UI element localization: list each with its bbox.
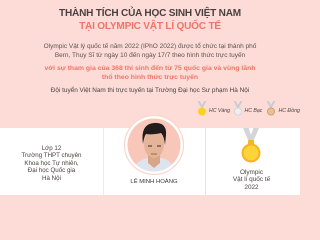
legend label: bronze: HC Đồng xyxy=(278,108,300,114)
intro text: Bern, Thụy Sĩ từ ngày 10 đến ngày 17/7 theo hình thức trực tuyến xyxy=(55,52,245,58)
legend label: gold: HC Vàng xyxy=(209,108,230,114)
panel: student band xyxy=(0,128,300,195)
student name: LÊ MINH HOÀNG xyxy=(130,179,178,185)
school text xyxy=(21,144,82,182)
title xyxy=(59,6,241,32)
school text: Đại học Quốc gia xyxy=(28,167,75,174)
title: THÀNH TÍCH CỦA HỌC SINH VIỆT NAM xyxy=(59,8,241,19)
school text: Khoa học Tự nhiên, xyxy=(24,160,79,167)
title: TẠI OLYMPIC VẬT LÍ QUỐC TẾ xyxy=(79,21,221,32)
school text: Trường THPT chuyên xyxy=(21,152,82,159)
achievement text: Olympic xyxy=(240,168,263,176)
school text: Lớp 12 xyxy=(42,144,61,152)
icon: large gold medal xyxy=(242,128,260,162)
legend label: silver: HC Bạc xyxy=(244,108,262,114)
panel: school xyxy=(0,128,104,195)
intro text: Olympic Vật lý quốc tế năm 2022 (IPhO 2022) được tổ chức tại thành phố xyxy=(44,43,256,50)
achievement text xyxy=(232,168,270,191)
icon: gold medal xyxy=(198,101,206,116)
student portrait xyxy=(124,115,184,176)
icon: silver medal xyxy=(234,101,242,115)
medal legend xyxy=(198,101,300,116)
achievement text: 2022 xyxy=(244,184,259,191)
highlighted participation text xyxy=(44,65,256,80)
achievement text: Vật lí quốc tế xyxy=(233,176,270,183)
highlighted participation text: với sự tham gia của 368 thí sinh đến từ 75 quốc gia và vùng lãnh xyxy=(44,65,256,72)
icon: bronze medal xyxy=(267,101,275,115)
team note: Đội tuyển Việt Nam thi trực tuyến tại Trường Đại học Sư phạm Hà Nội xyxy=(51,87,249,94)
school text: Hà Nội xyxy=(42,175,61,182)
highlighted participation text: thổ theo hình thức trực tuyến xyxy=(102,74,198,80)
intro text xyxy=(44,42,256,58)
panel: achievement xyxy=(205,128,301,195)
